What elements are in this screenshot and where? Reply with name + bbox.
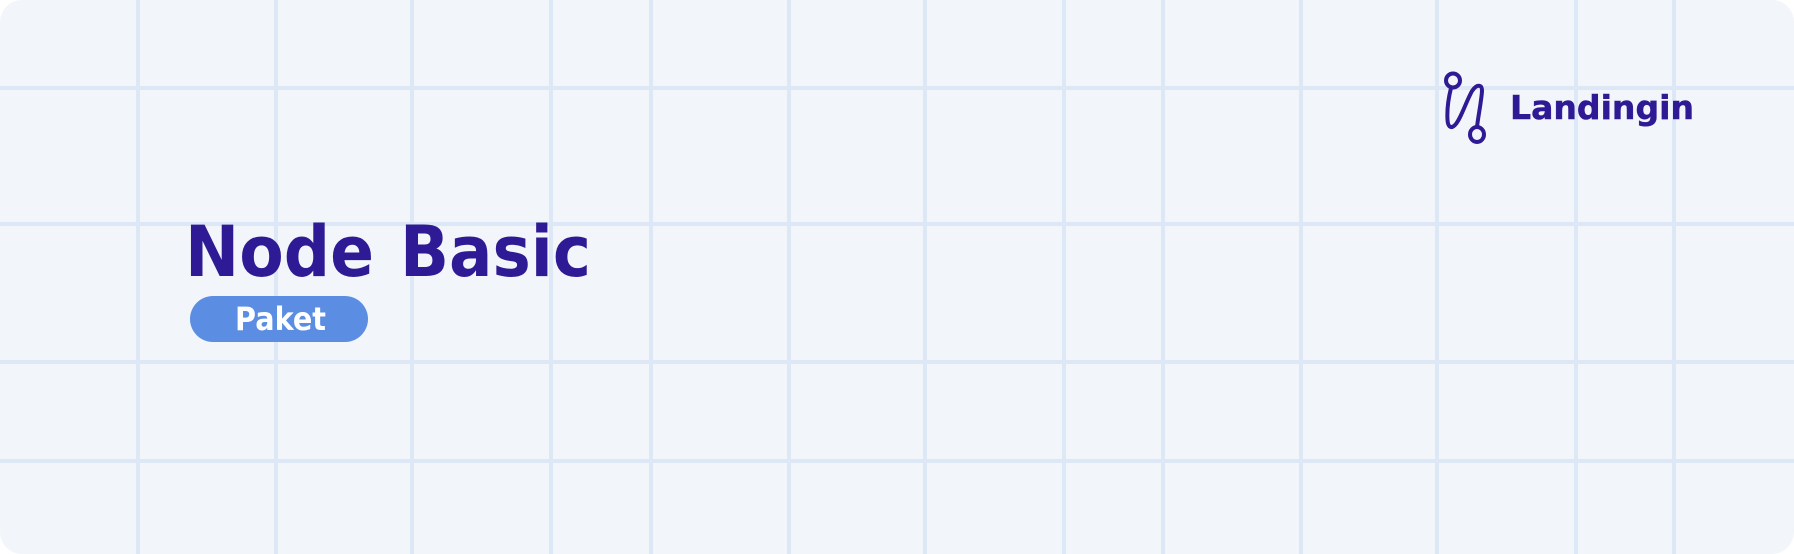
icon: node curve — [1446, 74, 1484, 142]
badge: Paket — [190, 296, 368, 342]
logo: Landingin — [1446, 74, 1694, 142]
badge: Paket: Paket — [235, 300, 326, 338]
title: Node — [185, 211, 374, 293]
title: Basic — [400, 211, 591, 293]
wordmark: Landingin — [1510, 88, 1694, 127]
title — [185, 211, 591, 293]
